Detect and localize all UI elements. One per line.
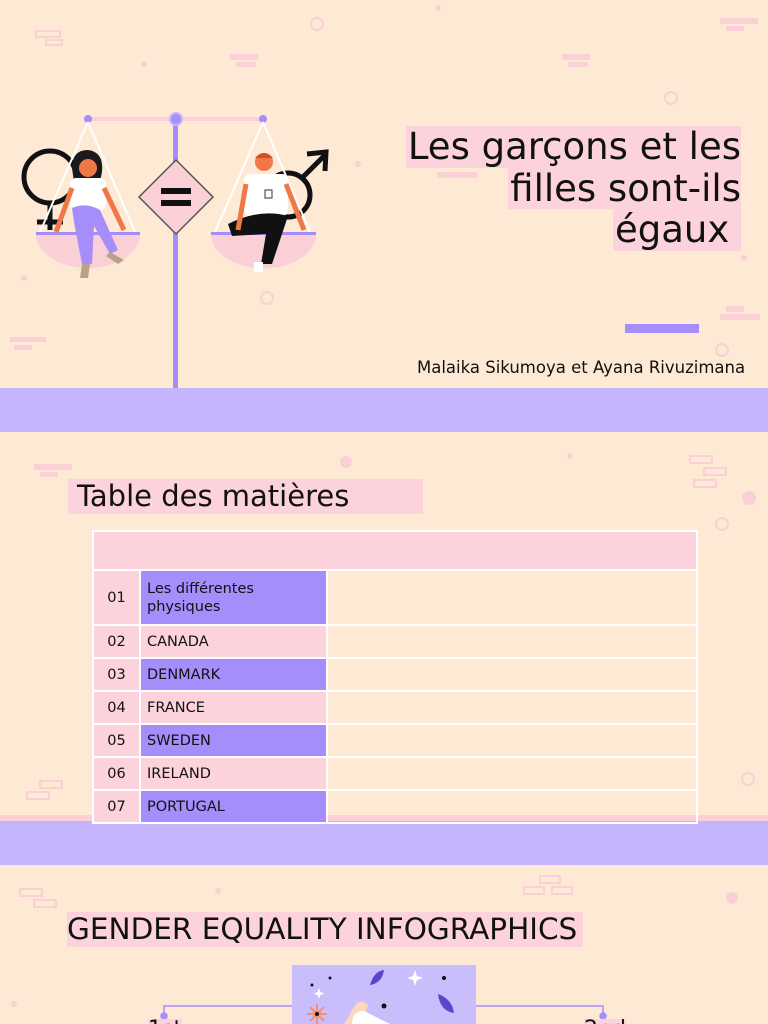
table of contents: DENMARK <box>147 666 220 682</box>
table of contents: FRANCE <box>147 700 205 716</box>
illustration: purple card with leaves <box>292 965 476 1024</box>
beam <box>84 113 267 389</box>
table of contents: physiques <box>147 598 220 614</box>
authors: Malaika Sikumoya et Ayana Rivuzimana <box>417 358 745 377</box>
heading: gender equality infographics: GENDER EQUALITY INFOGRAPHICS <box>67 912 577 946</box>
illustration: balance scale with girl and boy <box>22 112 329 388</box>
male symbol <box>266 152 326 217</box>
boy <box>228 153 304 272</box>
table of contents: SWEDEN <box>147 732 211 748</box>
accent bar <box>625 324 699 333</box>
table of contents: 05 <box>107 732 126 748</box>
table of contents: 02 <box>107 634 126 650</box>
heading: table des matières: Table des matières <box>77 479 349 513</box>
girl <box>56 150 124 278</box>
title: Les garçons et les <box>408 125 741 168</box>
pink line behind table <box>0 815 768 821</box>
pans <box>36 232 316 268</box>
strings <box>40 122 310 232</box>
table of contents <box>92 530 698 824</box>
table of contents: Les différentes <box>147 580 254 596</box>
table of contents: 07 <box>107 798 126 814</box>
title: égaux <box>615 208 729 251</box>
table of contents: IRELAND <box>147 766 211 782</box>
table of contents: 03 <box>107 666 126 682</box>
table of contents: 04 <box>107 700 126 716</box>
connector lines <box>160 1005 607 1019</box>
title: filles sont-ils <box>510 166 741 210</box>
table of contents: 06 <box>107 766 126 782</box>
table of contents: CANADA <box>147 634 209 650</box>
table of contents: 01 <box>107 590 126 606</box>
purple band 1 <box>0 388 768 432</box>
purple band 2 <box>0 821 768 865</box>
table of contents: PORTUGAL <box>147 798 225 814</box>
female symbol <box>24 151 76 230</box>
title <box>406 125 741 251</box>
equals sign diamond <box>139 160 213 234</box>
